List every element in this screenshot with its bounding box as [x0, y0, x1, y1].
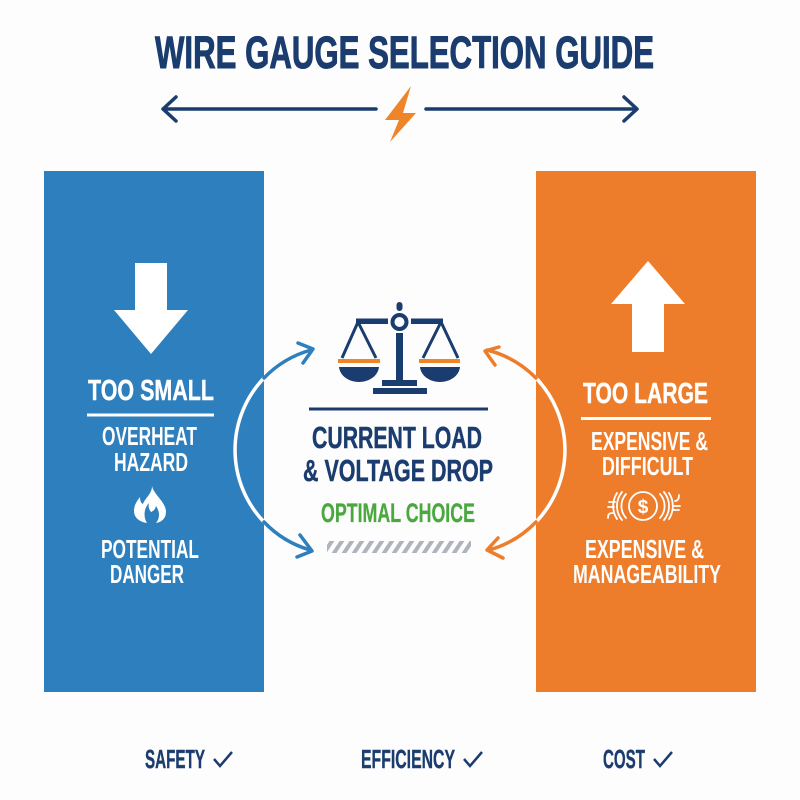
- text: current load and voltage drop: [303, 420, 493, 488]
- text: potential danger: POTENTIAL: [101, 534, 199, 564]
- icon: coiled cable with dollar: $: [638, 497, 649, 518]
- arrows: left curved cycle: [235, 343, 313, 557]
- heading: too large: TOO LARGE: [583, 378, 708, 410]
- footer: cost: COST: [603, 744, 645, 774]
- icon: coiled cable with dollar: [608, 492, 680, 520]
- text: current load and voltage drop: & VOLTAGE DROP: [303, 453, 493, 488]
- text: expensive and manageability: MANAGEABILITY: [573, 559, 721, 589]
- icon: balance scale: [338, 302, 460, 394]
- text: expensive and manageability: EXPENSIVE &: [585, 534, 704, 564]
- arrows: right curved cycle: [485, 347, 565, 558]
- text: optimal choice: OPTIMAL CHOICE: [321, 498, 475, 528]
- text: overheat hazard: [102, 421, 197, 477]
- text: expensive and difficult: EXPENSIVE &: [591, 426, 708, 456]
- text: expensive and difficult: DIFFICULT: [602, 451, 693, 481]
- panel: too large: [536, 171, 756, 692]
- icon: down arrow: [114, 263, 188, 354]
- text: expensive and difficult: [591, 426, 708, 481]
- icon: up arrow: [611, 261, 685, 352]
- text: potential danger: [101, 534, 199, 589]
- panel: too small: [44, 171, 264, 692]
- hatched bar: [327, 541, 471, 553]
- text: overheat hazard: OVERHEAT: [102, 421, 197, 451]
- icon: flame: [134, 486, 166, 523]
- double arrow with lightning bolt: [163, 86, 637, 142]
- divider: [309, 408, 488, 410]
- heading: too small: TOO SMALL: [88, 375, 214, 407]
- icon: lightning bolt: [385, 86, 416, 142]
- footer: safety: SAFETY: [145, 744, 205, 774]
- footer: efficiency: EFFICIENCY: [361, 744, 455, 774]
- arrow: left: [163, 97, 376, 121]
- arrow: right: [426, 97, 637, 121]
- text: expensive and manageability: [573, 534, 721, 589]
- text: current load and voltage drop: CURRENT LOAD: [312, 420, 482, 455]
- text: overheat hazard: HAZARD: [114, 447, 188, 477]
- text: potential danger: DANGER: [110, 559, 184, 589]
